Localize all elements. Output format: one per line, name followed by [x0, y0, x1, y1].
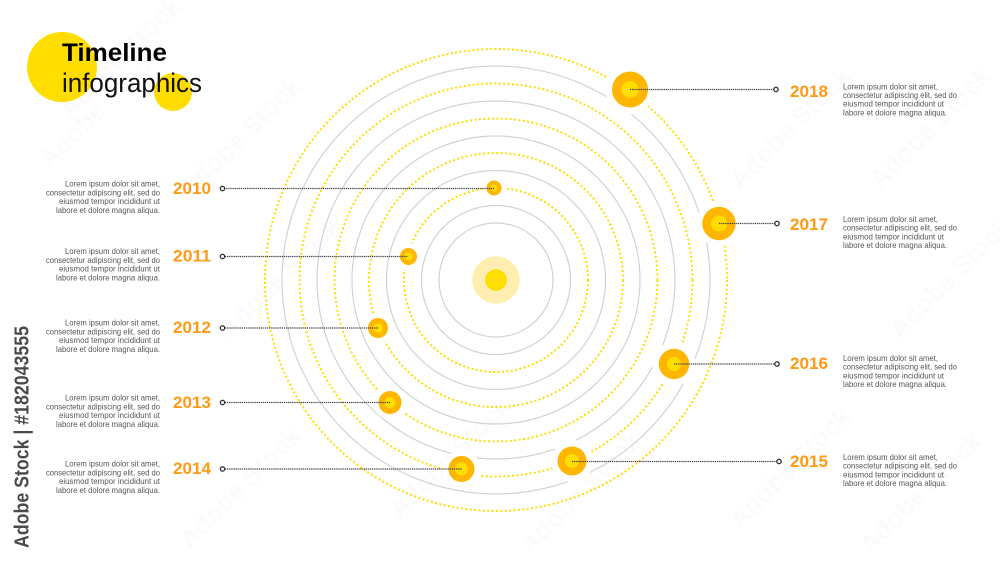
title: infographics — [62, 68, 202, 98]
connector 2013 — [220, 400, 390, 405]
text block 2017: labore et dolore magna aliqua. — [843, 240, 947, 250]
planet 2012 — [363, 313, 393, 343]
text block 2016: labore et dolore magna aliqua. — [843, 379, 947, 389]
connector 2016 — [674, 362, 779, 366]
connector 2012 — [220, 326, 378, 330]
text block 2016 — [843, 353, 957, 389]
text block 2017: Lorem ipsum dolor sit amet, — [843, 214, 938, 224]
planet 2018 — [605, 64, 655, 114]
connector 2014 — [220, 467, 462, 471]
text block 2010: labore et dolore magna aliqua. — [56, 205, 160, 215]
text block 2017: consectetur adipiscing elit, sed do — [843, 223, 957, 233]
text block 2014: consectetur adipiscing elit, sed do — [46, 467, 160, 477]
text block 2010: eiusmod tempor incididunt ut — [59, 196, 161, 206]
text block 2011 — [46, 246, 161, 282]
text block 2012: Lorem ipsum dolor sit amet, — [65, 318, 160, 328]
planet 2011 — [395, 243, 422, 270]
text block 2013: consectetur adipiscing elit, sed do — [46, 401, 160, 411]
connector 2017 — [719, 221, 779, 226]
year 2017: 2017 — [790, 215, 828, 234]
stock id side label: Adobe Stock | #182043555 — [12, 326, 34, 548]
text block 2017: eiusmod tempor incididunt ut — [843, 231, 945, 241]
text block 2012 — [46, 318, 161, 354]
text block 2010: consectetur adipiscing elit, sed do — [46, 187, 160, 197]
text block 2015: Lorem ipsum dolor sit amet, — [843, 452, 938, 462]
text block 2012: eiusmod tempor incididunt ut — [59, 335, 161, 345]
connector 2011 — [220, 254, 408, 259]
text block 2018: labore et dolore magna aliqua. — [843, 107, 947, 117]
text block 2010 — [46, 179, 161, 215]
year 2010: 2010 — [173, 179, 211, 198]
text block 2012: labore et dolore magna aliqua. — [56, 344, 160, 354]
year 2016: 2016 — [790, 354, 828, 373]
text block 2018: Lorem ipsum dolor sit amet, — [843, 81, 938, 91]
central sun — [472, 256, 520, 304]
text block 2013: eiusmod tempor incididunt ut — [59, 410, 161, 420]
text block 2010: Lorem ipsum dolor sit amet, — [65, 179, 160, 189]
title — [27, 32, 202, 111]
watermark pattern: Adobe Stock — [173, 420, 307, 554]
text block 2016: consectetur adipiscing elit, sed do — [843, 362, 957, 372]
planet 2017 — [696, 200, 742, 246]
text block 2011: eiusmod tempor incididunt ut — [59, 264, 161, 274]
text block 2018 — [843, 81, 957, 117]
text block 2014: eiusmod tempor incididunt ut — [59, 476, 161, 486]
year 2015: 2015 — [790, 452, 828, 471]
text block 2018: eiusmod tempor incididunt ut — [843, 99, 945, 109]
connector 2018 — [630, 87, 778, 92]
planet 2014 — [442, 450, 480, 488]
text block 2015: consectetur adipiscing elit, sed do — [843, 461, 957, 471]
watermark pattern: Adobe Stock — [723, 60, 857, 194]
year 2011: 2011 — [173, 246, 211, 266]
text block 2014: labore et dolore magna aliqua. — [56, 485, 160, 495]
text block 2011: consectetur adipiscing elit, sed do — [46, 255, 160, 265]
concentric orbit diagram — [265, 49, 727, 511]
watermark pattern: Adobe Stock — [723, 400, 857, 534]
watermark pattern: Adobe Stock — [33, 40, 167, 174]
planet 2013 — [373, 386, 407, 420]
year 2018: 2018 — [790, 82, 828, 101]
watermark pattern: Adobe Stock — [173, 70, 307, 204]
text block 2011: Lorem ipsum dolor sit amet, — [65, 246, 160, 256]
planet 2016 — [652, 342, 696, 386]
text block 2017 — [843, 214, 957, 250]
text block 2016: Lorem ipsum dolor sit amet, — [843, 353, 938, 363]
text block 2015: labore et dolore magna aliqua. — [843, 478, 947, 488]
connector 2010 — [220, 186, 494, 191]
text block 2013 — [46, 393, 161, 429]
planet 2015 — [551, 440, 593, 482]
text block 2015 — [843, 452, 957, 488]
watermark pattern: Adobe Stock — [513, 425, 647, 559]
text block 2018: consectetur adipiscing elit, sed do — [843, 90, 957, 100]
text block 2012: consectetur adipiscing elit, sed do — [46, 326, 160, 336]
year 2013: 2013 — [173, 393, 211, 412]
watermark pattern: Adobe Stock — [383, 390, 517, 524]
text block 2013: labore et dolore magna aliqua. — [56, 419, 160, 429]
watermark pattern: Adobe Stock — [853, 425, 987, 559]
year 2012: 2012 — [173, 318, 211, 337]
text block 2014 — [46, 459, 161, 495]
title: Timeline — [62, 39, 167, 67]
text block 2011: labore et dolore magna aliqua. — [56, 272, 160, 282]
watermark pattern: Adobe Stock — [213, 210, 347, 344]
year 2014: 2014 — [173, 459, 212, 478]
text block 2013: Lorem ipsum dolor sit amet, — [65, 393, 160, 403]
connector 2015 — [572, 459, 781, 464]
text block 2016: eiusmod tempor incididunt ut — [843, 370, 945, 380]
text block 2015: eiusmod tempor incididunt ut — [843, 469, 945, 479]
watermark pattern: Adobe Stock — [863, 60, 997, 194]
text block 2014: Lorem ipsum dolor sit amet, — [65, 459, 160, 469]
planet 2010 — [482, 176, 506, 200]
